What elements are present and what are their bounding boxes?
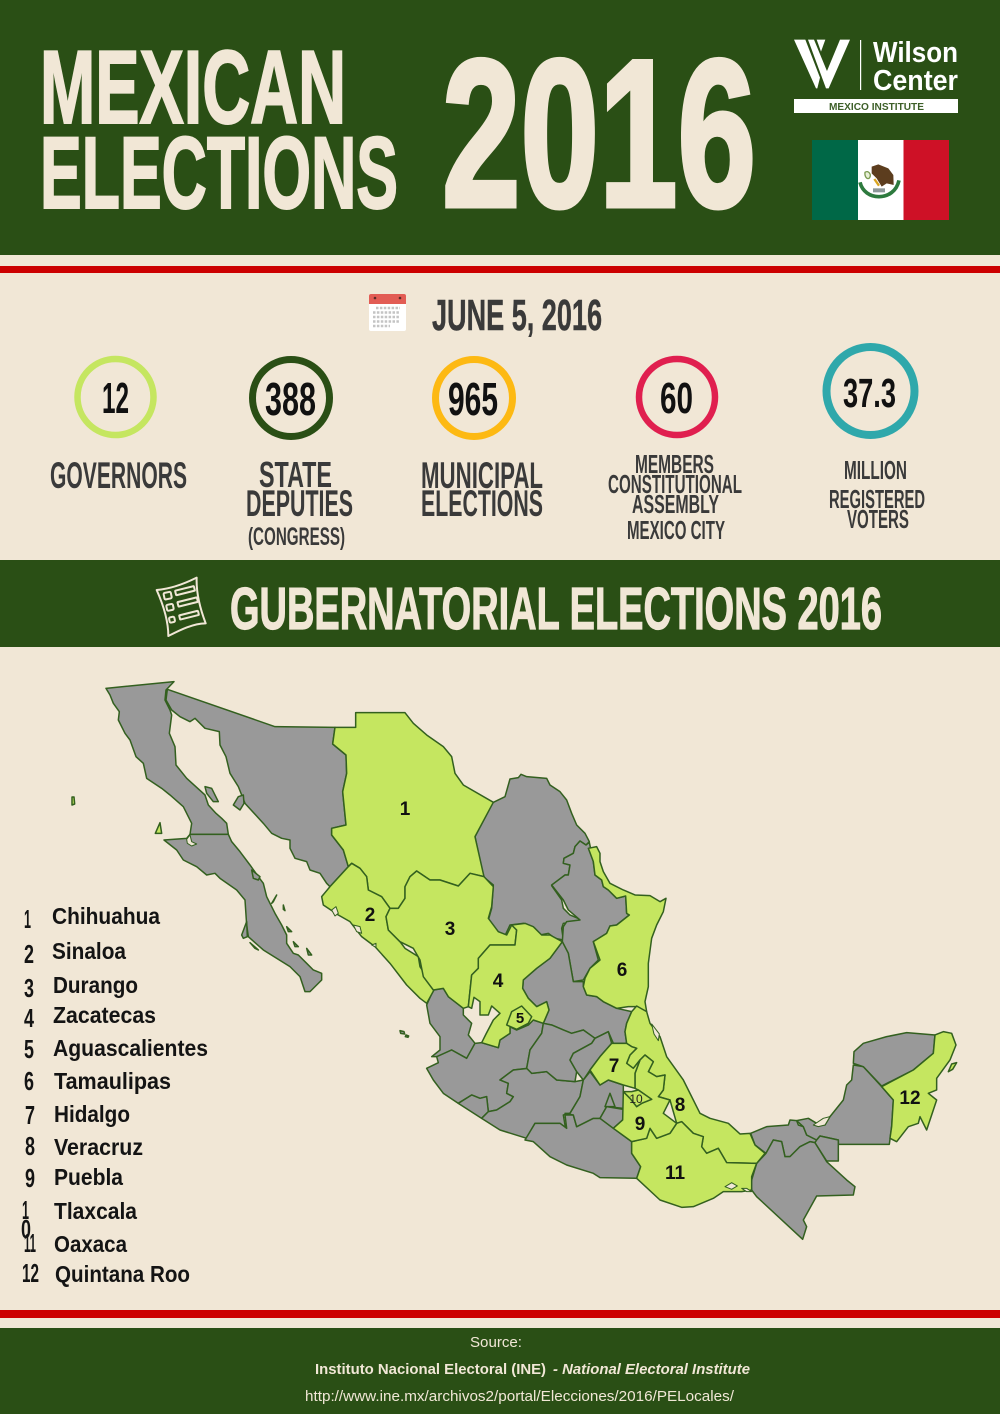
title: MEXICAN xyxy=(40,30,346,146)
legend: state names: Oaxaca xyxy=(54,1231,127,1257)
stat: governors: 12 xyxy=(102,374,129,423)
legend: numbers: 12 xyxy=(22,1258,39,1288)
stat: constitutional assembly: CONSTITUTIONAL xyxy=(608,469,742,499)
stat: constitutional assembly: MEMBERS xyxy=(635,449,714,479)
footer source text xyxy=(305,1334,750,1405)
map of Mexico xyxy=(72,682,957,1239)
map number labels: 11 xyxy=(665,1163,685,1184)
map number labels: 4 xyxy=(493,971,504,992)
footer source text: - National Electoral Institute xyxy=(553,1361,750,1378)
legend: state names xyxy=(52,903,208,1287)
stat: municipal elections: MUNICIPAL xyxy=(421,455,543,496)
legend: numbers: 5 xyxy=(24,1034,34,1064)
map number labels: 12 xyxy=(899,1088,921,1109)
footer source text: Source: xyxy=(470,1334,522,1351)
date heading: JUNE 5, 2016 xyxy=(432,291,602,340)
map: northwest states xyxy=(72,682,348,992)
legend: state names: Puebla xyxy=(54,1164,123,1190)
legend: state names: Aguascalientes xyxy=(53,1035,208,1061)
legend: numbers: 9 xyxy=(25,1163,35,1193)
title: ELECTIONS xyxy=(40,116,398,230)
map number labels: 9 xyxy=(635,1114,645,1135)
stat: constitutional assembly: MEXICO CITY xyxy=(627,515,725,545)
stat: constitutional assembly: ASSEMBLY xyxy=(632,489,719,519)
legend: state names: Veracruz xyxy=(54,1134,143,1160)
icon: W mark xyxy=(794,40,850,88)
logo: Wilson Center: MEXICO INSTITUTE xyxy=(829,102,924,113)
icon: ballot checklist xyxy=(157,578,206,636)
stat: constitutional assembly xyxy=(608,359,742,545)
legend: numbers: 2 xyxy=(24,939,34,969)
map: Sinaloa, Chihuahua (highlighted) xyxy=(322,713,493,1003)
stat: state deputies: STATE xyxy=(259,454,332,495)
legend: state names: Zacatecas xyxy=(53,1002,156,1028)
legend: numbers: 6 xyxy=(24,1066,34,1096)
map: southeast gray states xyxy=(751,1033,935,1239)
map number labels: 3 xyxy=(445,919,455,940)
legend: numbers xyxy=(21,904,39,1288)
map: Quintana Roo (highlighted) xyxy=(882,1032,957,1142)
stat: constitutional assembly: 60 xyxy=(660,374,693,423)
map number labels: 7 xyxy=(609,1056,619,1077)
logo: Wilson Center xyxy=(794,37,958,113)
header band xyxy=(0,0,1000,255)
footer band xyxy=(0,1328,1000,1414)
section band xyxy=(0,560,1000,647)
title xyxy=(40,16,756,251)
logo: Wilson Center: Wilson xyxy=(873,37,958,69)
footer source text: Instituto Nacional Electoral (INE) xyxy=(315,1361,546,1378)
legend: numbers: 1 xyxy=(24,904,31,934)
legend: state names: Quintana Roo xyxy=(55,1261,190,1287)
legend: numbers: 8 xyxy=(25,1131,35,1161)
legend: state names: Chihuahua xyxy=(52,903,160,929)
legend: state names: Sinaloa xyxy=(52,938,126,964)
footer source text: http://www.ine.mx/archivos2/portal/Elecciones/2016/PELocales/ xyxy=(305,1388,735,1405)
stat: registered voters: MILLION xyxy=(844,455,907,485)
legend: state names: Durango xyxy=(53,972,138,998)
stat: registered voters xyxy=(826,347,925,534)
map number labels: 6 xyxy=(617,960,627,981)
stat: registered voters: VOTERS xyxy=(847,504,909,534)
map number labels: 10 xyxy=(629,1092,643,1106)
stat: state deputies: DEPUTIES xyxy=(246,483,353,524)
stat: state deputies xyxy=(246,360,353,551)
stat: municipal elections: ELECTIONS xyxy=(421,483,543,524)
map number labels: 1 xyxy=(400,799,411,820)
legend: state names: Tamaulipas xyxy=(54,1068,171,1094)
stat: municipal elections: 965 xyxy=(448,373,498,425)
legend: numbers: 1 xyxy=(22,1195,29,1225)
map: central highlighted states xyxy=(386,847,765,1207)
map: northeast gray states xyxy=(475,774,629,982)
stat: state deputies: (CONGRESS) xyxy=(248,523,345,551)
legend: numbers: 0 xyxy=(21,1214,31,1244)
icon: calendar xyxy=(369,294,406,331)
logo: Wilson Center: Center xyxy=(873,65,958,97)
legend: numbers: 4 xyxy=(24,1003,34,1033)
stat: state deputies: 388 xyxy=(265,373,316,425)
map: central and southern gray states xyxy=(400,942,641,1178)
legend: numbers: 7 xyxy=(25,1100,35,1130)
legend: state names: Hidalgo xyxy=(54,1101,130,1127)
legend: numbers: 11 xyxy=(24,1228,36,1258)
stat: governors xyxy=(50,359,187,496)
stat: registered voters: REGISTERED xyxy=(829,484,925,514)
legend: state names: Tlaxcala xyxy=(54,1198,137,1224)
stat: governors: GOVERNORS xyxy=(50,455,187,496)
legend: numbers: 3 xyxy=(24,973,34,1003)
map number labels: 2 xyxy=(365,905,375,926)
map number labels xyxy=(365,799,921,1184)
stat: registered voters: 37.3 xyxy=(843,370,896,416)
map number labels: 5 xyxy=(516,1010,524,1027)
map number labels: 8 xyxy=(675,1095,685,1116)
icon: Mexican flag xyxy=(812,140,949,220)
title: 2016 xyxy=(442,16,756,251)
stat: municipal elections xyxy=(421,360,543,524)
red rule bottom xyxy=(0,1310,1000,1318)
red rule top xyxy=(0,266,1000,273)
